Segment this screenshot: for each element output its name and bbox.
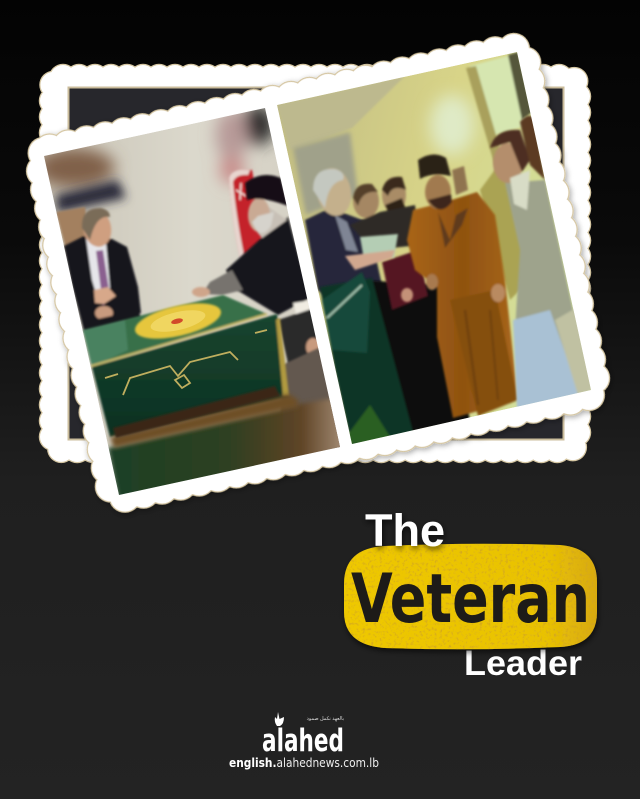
- alahed logo: [229, 712, 379, 770]
- men in background: [350, 166, 468, 250]
- gold table inlay lines: [105, 330, 267, 395]
- grey-haired man and suit: [305, 165, 382, 300]
- title word: The: The: [365, 505, 445, 556]
- window: [293, 132, 358, 215]
- blurred brown wall patch: [35, 105, 274, 188]
- ceiling: [277, 76, 405, 150]
- website address: english.alahednews.com.lb: [229, 756, 379, 770]
- arabic tagline: بالعهد نكمل صمود: [307, 716, 344, 722]
- front scalloped photo card: [38, 47, 597, 499]
- icon: flame: [275, 712, 284, 726]
- red folder: [382, 250, 428, 310]
- window strip behind seated man: [56, 206, 87, 248]
- document and hand: [345, 234, 413, 302]
- door and frame: [466, 52, 532, 300]
- yellow title plate: [344, 544, 597, 649]
- back scalloped photo frame: [53, 78, 577, 449]
- blurred foreground: [108, 396, 350, 500]
- left photo: two leaders at a green table: [35, 105, 350, 500]
- wooden base: [110, 394, 298, 448]
- seated man in dark suit: [64, 207, 141, 332]
- right photo: group in a corridor: [277, 52, 592, 447]
- logo wordmark: alahed: [262, 723, 344, 759]
- man in brown robe: [407, 154, 518, 418]
- dark lower garments: [320, 272, 470, 447]
- man in grey robe: [490, 116, 592, 410]
- title word: Leader: Leader: [464, 644, 582, 683]
- gold table mandala: [134, 302, 222, 340]
- seated man in black robe and turban: [192, 175, 326, 372]
- carpet and floor: [282, 347, 340, 449]
- green table: [83, 295, 289, 437]
- dark blurred patch with cut edge: [56, 180, 126, 213]
- iranian flag: [229, 170, 265, 258]
- light on back wall: [430, 95, 474, 155]
